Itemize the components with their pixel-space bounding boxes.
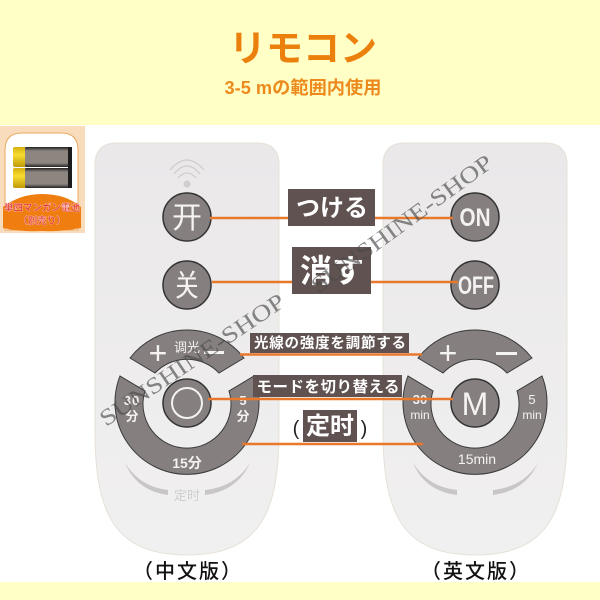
button: timer ring: 5 bbox=[528, 392, 536, 407]
panel: English remote bbox=[383, 143, 567, 555]
battery caption: 単四マンガン電池 bbox=[4, 202, 80, 214]
panel: battery note bbox=[0, 126, 85, 233]
label: timer bbox=[293, 410, 367, 442]
button: dimming arc bbox=[130, 330, 244, 373]
button: timer ring: 分 bbox=[236, 409, 250, 424]
button: timer ring: min bbox=[410, 408, 430, 422]
caption: Chinese version: （中文版） bbox=[133, 560, 243, 583]
button: timer ring: 5 bbox=[239, 393, 247, 408]
icon: AA batteries bbox=[13, 147, 72, 188]
button: timer ring: 15分 bbox=[172, 455, 202, 471]
button: 开: 开 bbox=[172, 202, 202, 235]
subtitle: 3-5 mの範囲内使用 bbox=[224, 77, 382, 98]
icon: wifi signal bbox=[170, 160, 204, 188]
timer guide arcs bbox=[125, 463, 250, 503]
timer guide arcs bbox=[413, 463, 538, 495]
label: 消す bbox=[292, 247, 371, 294]
bottom banner bbox=[0, 582, 600, 600]
button: ON: ON bbox=[460, 204, 490, 232]
battery caption: （別売り） bbox=[18, 215, 66, 227]
label: timer: ( bbox=[293, 418, 300, 440]
watermark: SUNSHINE-SHOP bbox=[95, 289, 290, 431]
button: mode circle bbox=[163, 379, 211, 427]
button: OFF: OFF bbox=[458, 272, 494, 300]
button: timer ring: 30 bbox=[124, 393, 140, 408]
button: M: M bbox=[462, 386, 488, 422]
panel: Chinese remote bbox=[95, 143, 279, 555]
button: timer ring bbox=[115, 376, 259, 474]
button: timer ring: 30 bbox=[413, 392, 427, 407]
button: ON bbox=[451, 193, 499, 241]
button: 关: 关 bbox=[172, 270, 202, 303]
button: timer ring bbox=[403, 376, 547, 474]
button: timer ring: min bbox=[522, 408, 542, 422]
label: timer: ) bbox=[361, 418, 367, 440]
label: つける: つける bbox=[296, 195, 368, 222]
button: OFF bbox=[451, 261, 499, 309]
button: 开 bbox=[163, 193, 211, 241]
button: dimming arc: 调光 bbox=[174, 340, 200, 355]
title: リモコン bbox=[229, 28, 377, 69]
label: timer: 定时 bbox=[306, 413, 354, 440]
label: つける bbox=[288, 189, 375, 226]
caption: English version: （英文版） bbox=[421, 560, 531, 583]
watermark: SUNSHINE-SHOP bbox=[306, 150, 497, 298]
connector lines bbox=[208, 218, 458, 444]
label: 消す: 消す bbox=[300, 253, 364, 289]
button: plus minus arc bbox=[418, 330, 532, 373]
top banner bbox=[0, 0, 600, 125]
button: M bbox=[451, 379, 499, 427]
button: 关 bbox=[163, 261, 211, 309]
label: mode switch: モードを切り替える bbox=[256, 378, 400, 396]
button: timer ring: 分 bbox=[125, 409, 139, 424]
timer guide arcs: 定时 bbox=[174, 488, 200, 503]
label: brightness: 光線の強度を調節する bbox=[254, 334, 406, 352]
battery caption bbox=[4, 202, 80, 227]
button: plus minus arc: + bbox=[439, 335, 457, 371]
watermark bbox=[95, 150, 497, 431]
button: dimming arc: + bbox=[149, 335, 167, 371]
button: timer ring: 15min bbox=[458, 451, 496, 467]
